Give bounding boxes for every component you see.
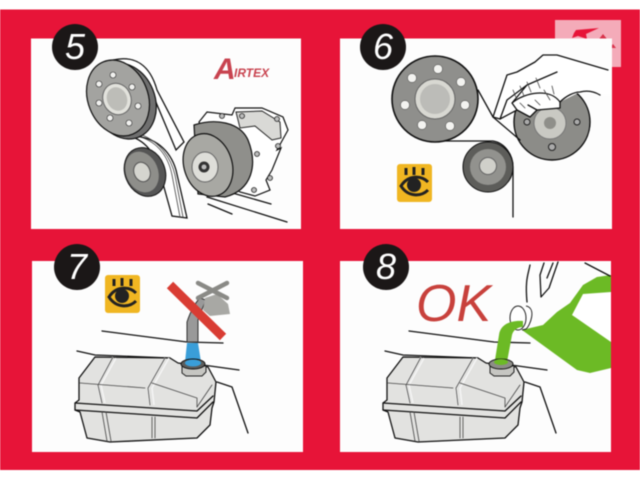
panel: step 6 belt tension by hand	[340, 38, 612, 229]
AIRTEX logo: IRTEX	[234, 66, 270, 80]
idler pulley	[117, 141, 173, 203]
eye icon	[397, 164, 432, 202]
coolant tank	[75, 351, 248, 442]
panel: step 7 no tap water	[32, 261, 303, 452]
line behind	[102, 331, 223, 343]
lower pulley	[463, 142, 513, 192]
step number 8: 8	[376, 246, 396, 287]
prohibited red bar	[170, 285, 223, 337]
step number 5: 5	[65, 26, 86, 67]
water stream	[185, 343, 201, 362]
coolant stream	[495, 321, 523, 362]
OK text: OK	[416, 275, 493, 333]
hand	[493, 55, 611, 119]
panel: step 8 pour coolant	[340, 261, 611, 452]
step number 8	[363, 244, 409, 290]
right pulley	[514, 84, 590, 160]
water pump	[175, 108, 288, 222]
filler cap	[181, 359, 206, 376]
step number 6	[360, 24, 406, 70]
AIRTEX logo	[213, 53, 270, 86]
AIRTEX logo: A	[213, 53, 236, 86]
tap	[187, 283, 230, 342]
step number 5	[52, 24, 98, 70]
coolant bottle	[510, 262, 611, 373]
large pulley	[76, 51, 167, 149]
step number 6: 6	[373, 26, 394, 67]
eye icon	[105, 275, 140, 313]
logo box: pink badge with star	[555, 20, 621, 67]
filler neck	[489, 359, 514, 376]
coolant tank	[383, 351, 556, 442]
big pulley	[392, 56, 478, 142]
step number 7	[54, 244, 100, 290]
belt	[113, 59, 187, 218]
panel: step 5 belt and water pump	[31, 38, 301, 229]
belt	[437, 90, 520, 217]
step number 7: 7	[67, 246, 89, 287]
